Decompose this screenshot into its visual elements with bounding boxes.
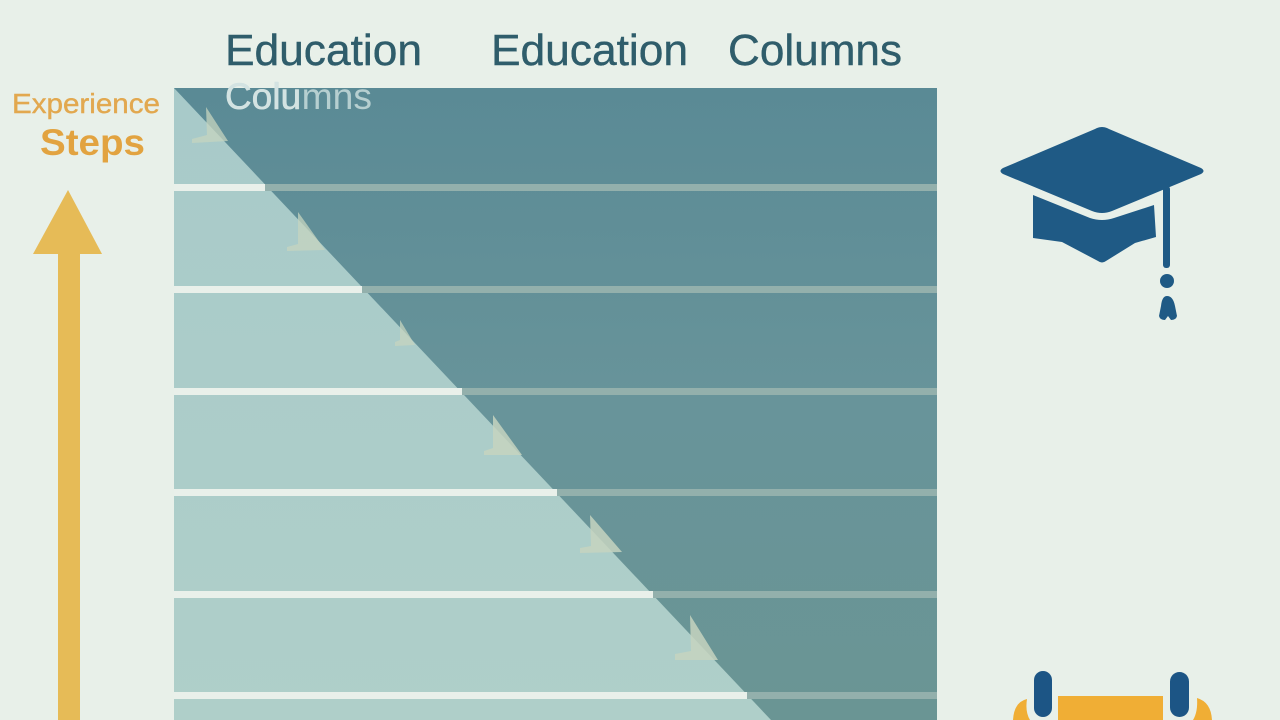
arrow: experience axis upward — [33, 190, 102, 720]
calendar right shoulder — [1193, 698, 1212, 720]
arrow: step 2 — [287, 212, 325, 251]
label: Experience: Experience — [12, 88, 160, 119]
calendar left shoulder — [1013, 699, 1030, 720]
calendar left ring — [1034, 671, 1052, 717]
ghost label: Columns: Columns — [225, 76, 372, 117]
heading: Education right: Education — [491, 26, 688, 75]
panel: experience steps light triangle — [174, 88, 771, 720]
label: Steps: Steps — [40, 122, 145, 163]
icon: calendar — [1013, 671, 1212, 720]
step arrows — [192, 107, 718, 660]
ghost label: Columns: Colu — [225, 76, 301, 117]
arrow: step 3 — [395, 320, 415, 346]
arrow: step 4 — [484, 415, 522, 455]
arrow: step 5 — [580, 515, 622, 553]
grid rows left side — [174, 184, 747, 699]
grid rows right side — [264, 184, 937, 699]
calendar body — [1058, 696, 1163, 720]
heading: Education left: Education — [225, 26, 422, 75]
calendar right ring — [1170, 672, 1189, 717]
arrow: step 1 — [192, 107, 228, 143]
arrow: step 6 — [675, 615, 718, 660]
panel: education columns dark area — [174, 88, 937, 720]
icon: graduation cap — [1000, 127, 1204, 320]
heading: Columns: Columns — [728, 26, 902, 75]
panel: staircase grid — [174, 88, 937, 720]
